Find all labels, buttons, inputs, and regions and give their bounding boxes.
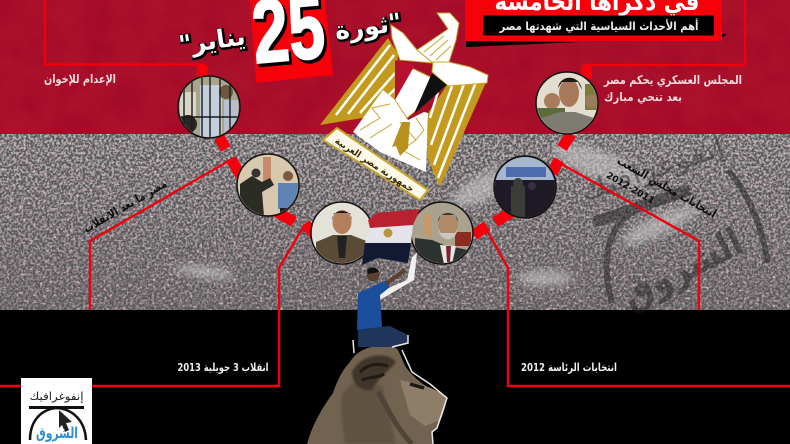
headline: thawra: ثورة" xyxy=(333,7,404,47)
label: execution of the Brotherhood: الإعدام للإخوان xyxy=(44,72,116,87)
subtitle bar: أهم الأحداث السياسية التي شهدتها مصر xyxy=(499,18,698,33)
photo: general Sisi xyxy=(311,202,373,264)
photo: parliamentary election crowd xyxy=(494,156,556,218)
subtitle bar xyxy=(483,16,714,36)
watermark: infographic logo: الشروق xyxy=(614,219,750,318)
label: presidential elections: انتخابات الرئاسة 2012 xyxy=(521,361,617,374)
background: crowd photo band xyxy=(0,134,790,310)
photo: prisoners behind bars xyxy=(178,76,240,138)
illustration: man waving the flag xyxy=(353,209,420,353)
label: 2011-2012: 2012-2011 xyxy=(604,171,656,207)
photo: soldiers and civilian xyxy=(237,154,299,216)
flag xyxy=(362,209,420,300)
logo: Shorouk infographic: إنفوغرافيك xyxy=(30,390,84,403)
man xyxy=(353,268,408,353)
right wing xyxy=(427,80,487,187)
label: July 3 coup: انقلاب 3 جويلية 2013 xyxy=(178,361,268,374)
label: post-coup Egypt: مصر ما بعد الانقلاب xyxy=(81,176,169,236)
background: red band xyxy=(0,0,790,134)
watermark: infographic logo xyxy=(577,133,767,318)
headline: yanayir: "يناير xyxy=(178,22,248,61)
photo: field marshal Tantawi xyxy=(536,72,599,134)
photo: president Morsi xyxy=(411,202,473,264)
label: after Mubarak stepped down: بعد تنحي مبارك xyxy=(604,90,682,104)
left wing xyxy=(320,38,398,125)
logo: Shorouk infographic xyxy=(21,378,92,444)
logo: Shorouk infographic: الشروق xyxy=(36,424,78,442)
timeline: thick red connector stubs xyxy=(202,65,586,238)
eagle legs xyxy=(353,90,428,172)
background: black band xyxy=(0,310,790,444)
title panel xyxy=(465,0,726,47)
shield xyxy=(395,60,447,118)
label: parliamentary elections: انتخابات مجلس الشعب xyxy=(615,153,719,221)
label: military council: المجلس العسكري يحكم مصر xyxy=(603,73,742,87)
watermark: infographic logo: إنفوغرافيك xyxy=(577,133,728,208)
banner: جمهورية مصر العربية xyxy=(333,136,416,195)
icon: eagle of Saladin emblem xyxy=(320,13,488,200)
eagle shoulders, neck and head xyxy=(391,13,488,86)
illustration: lion statue xyxy=(307,346,447,444)
headline: yanayir: "يناير xyxy=(177,21,247,61)
headline: thawra: ثورة" xyxy=(334,8,405,47)
